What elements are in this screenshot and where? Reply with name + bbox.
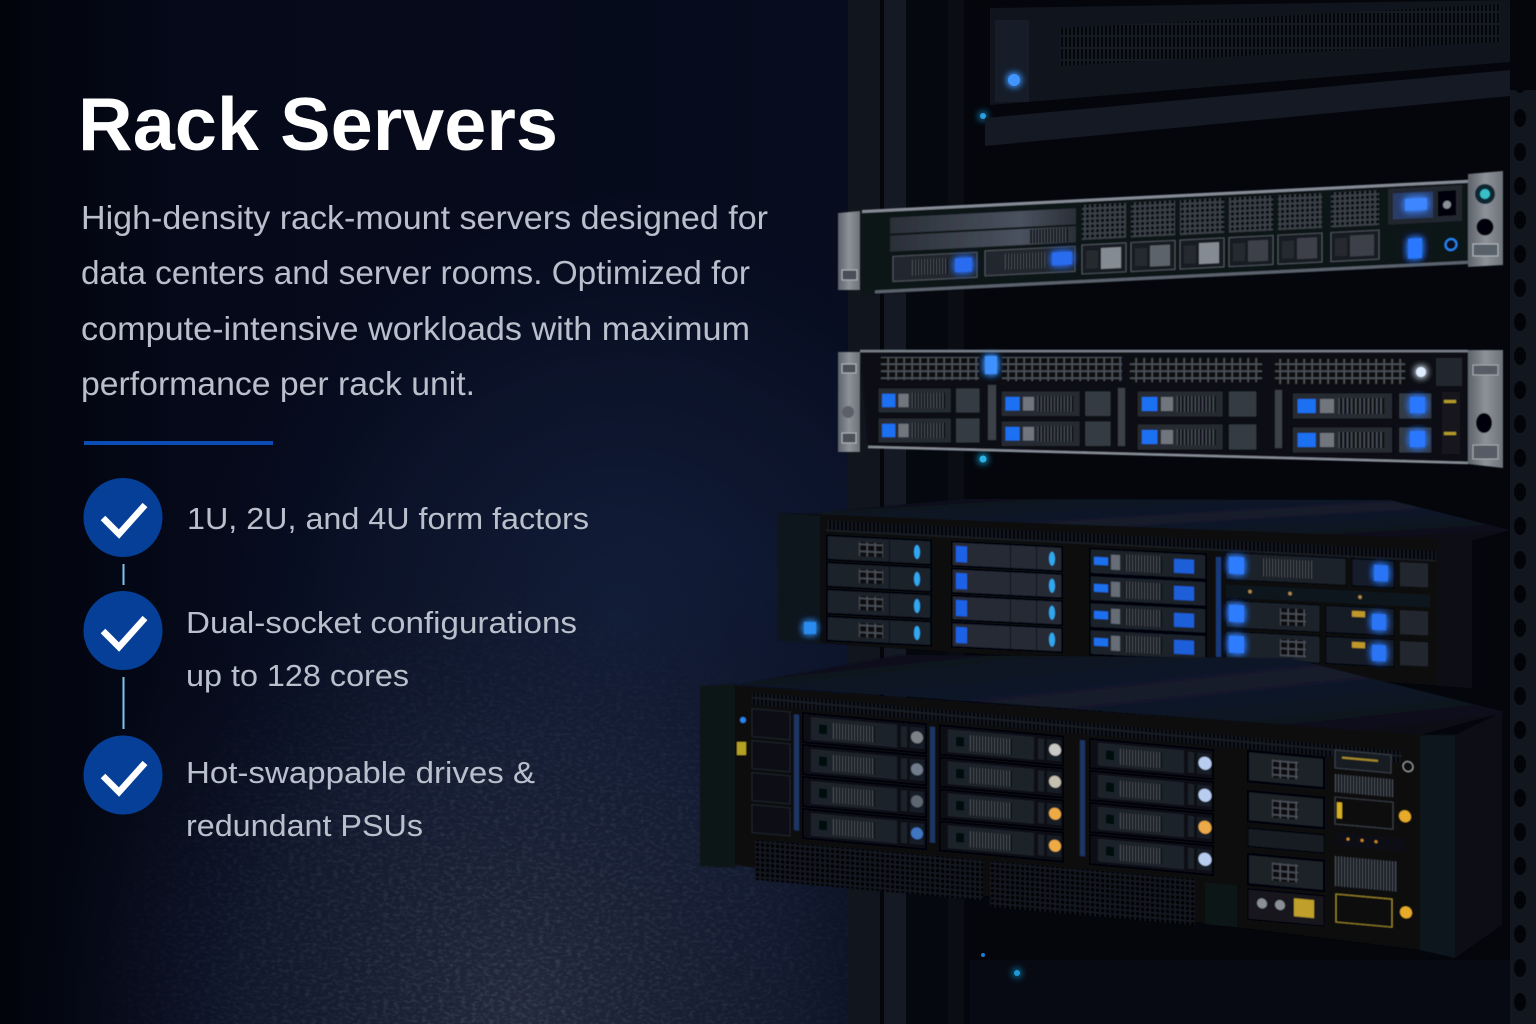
feature: hot-swap: Hot-swappable drives & (186, 755, 535, 790)
1U chassis front (862, 180, 1468, 295)
right handle (1420, 735, 1455, 958)
feature: form factors: 1U, 2U, and 4U form factors (187, 501, 589, 536)
feature: dual-socket: up to 128 cores (186, 658, 409, 693)
top cover (740, 655, 1505, 735)
icon: check 2 (84, 591, 162, 670)
title: Rack Servers (78, 82, 558, 166)
description paragraph (81, 199, 768, 402)
drive bays (878, 385, 1460, 454)
chassis front (735, 685, 1420, 950)
right mounting ear (1468, 171, 1503, 267)
top cover (806, 499, 1510, 541)
left handle (700, 684, 746, 868)
icon: check 1 (84, 478, 162, 557)
status LEDs (985, 356, 1462, 386)
feature: dual-socket (186, 605, 577, 693)
description paragraph: performance per rack unit. (81, 365, 475, 402)
server rack frame (848, 0, 1536, 1024)
description paragraph: data centers and server rooms. Optimized for (81, 254, 750, 291)
server 3: 2U storage unit (778, 499, 1510, 688)
feature: hot-swap: redundant PSUs (186, 808, 423, 843)
server 4: 4U storage unit (700, 655, 1505, 958)
left mounting ear (838, 211, 860, 290)
chassis front (778, 513, 1472, 688)
divider (84, 441, 273, 445)
server 2: 2U unit (838, 350, 1503, 468)
feature: hot-swap (186, 755, 535, 843)
server 1: 1U unit (838, 171, 1503, 295)
chassis front (860, 350, 1468, 463)
description paragraph: compute-intensive workloads with maximum (81, 310, 750, 347)
vent strip and drive bays (826, 520, 1436, 672)
top vent grilles (881, 357, 1405, 384)
right mounting ear (1468, 350, 1503, 468)
feature: dual-socket: Dual-socket configurations (186, 605, 577, 640)
icon: check 3 (84, 736, 162, 814)
top rack unit (985, 0, 1510, 146)
left mounting ear (838, 352, 860, 452)
side panel (1455, 712, 1502, 958)
right handle (1438, 538, 1472, 688)
connector: second to third check (122, 677, 124, 729)
vents, drives and controls (752, 693, 1413, 945)
description paragraph: High-density rack-mount servers designed for (81, 199, 768, 236)
left handle (778, 513, 820, 644)
background (0, 0, 848, 1024)
connector: first to second check (122, 564, 124, 585)
